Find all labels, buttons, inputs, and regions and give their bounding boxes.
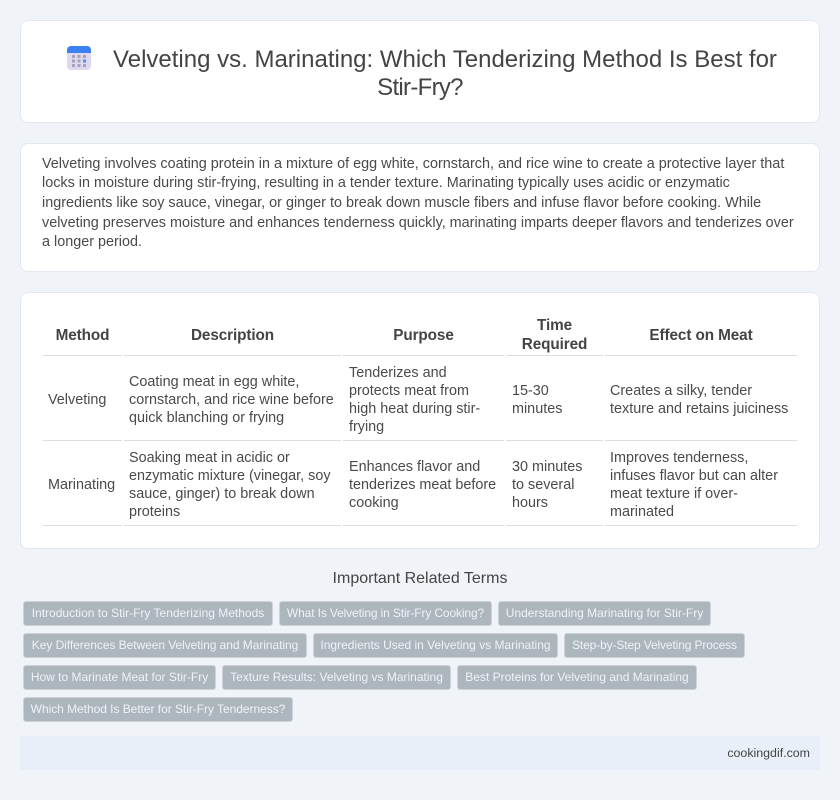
table row: marinating: proteins bbox=[129, 504, 180, 520]
table row: marinating: cooking bbox=[349, 495, 399, 511]
table row: velveting: quick blanching or frying bbox=[129, 410, 284, 426]
table header: Time bbox=[537, 317, 572, 334]
description text: ingredients like soy sauce, vinegar, or ginger to break down muscle fibers and infuse flavor before cooking. While bbox=[42, 195, 761, 211]
description text: Velveting involves coating protein in a mixture of egg white, cornstarch, and rice wine to create a protective layer that bbox=[42, 156, 784, 172]
table row: velveting: protects meat from bbox=[349, 383, 469, 399]
footer bbox=[20, 736, 820, 770]
panel: comparison table bbox=[20, 292, 820, 549]
table row: velveting: Creates a silky, tender bbox=[610, 383, 752, 399]
table row: marinating: hours bbox=[512, 495, 548, 511]
table row: marinating: Soaking meat in acidic or bbox=[129, 450, 290, 466]
title: Stir-Fry? bbox=[377, 74, 463, 101]
table row: velveting: texture and retains juiciness bbox=[610, 401, 788, 417]
related term tags: Key Differences Between Velveting and Marinating bbox=[32, 638, 298, 652]
table header: Required bbox=[522, 336, 587, 353]
table row: marinating: tenderizes meat before bbox=[349, 477, 496, 493]
table row: marinating: Improves tenderness, bbox=[610, 450, 748, 466]
table header: Effect on Meat bbox=[649, 327, 753, 344]
table row: velveting: Coating meat in egg white, bbox=[129, 374, 299, 390]
related term tags: Introduction to Stir-Fry Tenderizing Methods bbox=[32, 606, 264, 620]
related term tags bbox=[23, 601, 745, 722]
description text: locks in moisture during stir-frying, resulting in a tender texture. Marinating typically uses acidic or enzymatic bbox=[42, 175, 730, 191]
table row: marinating: enzymatic mixture (vinegar, soy bbox=[129, 468, 331, 484]
table row: velveting bbox=[48, 365, 788, 435]
table row: velveting: high heat during stir- bbox=[349, 401, 480, 417]
description text: a longer period. bbox=[42, 234, 142, 250]
table row: marinating bbox=[48, 450, 778, 520]
related terms heading: Important Related Terms bbox=[333, 570, 507, 587]
description text bbox=[42, 156, 794, 250]
table row: velveting: 15-30 bbox=[512, 383, 549, 399]
table row: marinating: 30 minutes bbox=[512, 459, 582, 475]
table row: marinating: sauce, ginger) to break down bbox=[129, 486, 315, 502]
header panel bbox=[20, 20, 820, 123]
related term tags: Understanding Marinating for Stir-Fry bbox=[506, 606, 703, 620]
title bbox=[113, 46, 777, 101]
footer source: cookingdif.com bbox=[727, 746, 810, 760]
related term tags: What Is Velveting in Stir-Fry Cooking? bbox=[287, 606, 484, 620]
title: Velveting vs. Marinating: Which Tenderizing Method Is Best for bbox=[113, 46, 777, 73]
description text: velveting preserves moisture and enhances tenderness quickly, marinating imparts deeper flavors and tenderizes over bbox=[42, 215, 794, 231]
table row: velveting: minutes bbox=[512, 401, 562, 417]
table row: marinating: infuses flavor but can alter bbox=[610, 468, 778, 484]
table header: Description bbox=[191, 327, 274, 344]
table header bbox=[56, 317, 753, 353]
related term tags: Step-by-Step Velveting Process bbox=[572, 638, 737, 652]
table row: velveting: frying bbox=[349, 419, 384, 435]
related term tags: Best Proteins for Velveting and Marinating bbox=[465, 670, 689, 684]
icon: calendar bbox=[67, 46, 91, 70]
related term tags: Texture Results: Velveting vs Marinating bbox=[230, 670, 443, 684]
related term tags: How to Marinate Meat for Stir-Fry bbox=[31, 670, 208, 684]
table row: marinating: to several bbox=[512, 477, 574, 493]
table row: marinating: marinated bbox=[610, 504, 674, 520]
table row: velveting: Tenderizes and bbox=[349, 365, 447, 381]
table header: Purpose bbox=[393, 327, 454, 344]
related term tags: Ingredients Used in Velveting vs Marinating bbox=[320, 638, 551, 652]
table row: marinating: Marinating bbox=[48, 477, 115, 493]
table row: marinating: meat texture if over- bbox=[610, 486, 738, 502]
table header: Method bbox=[56, 327, 109, 344]
table row: marinating: Enhances flavor and bbox=[349, 459, 480, 475]
related term tags: Which Method Is Better for Stir-Fry Tenderness? bbox=[31, 702, 285, 716]
table row: velveting: Velveting bbox=[48, 392, 106, 408]
table row: velveting: cornstarch, and rice wine before bbox=[129, 392, 334, 408]
panel: description bbox=[20, 143, 820, 272]
